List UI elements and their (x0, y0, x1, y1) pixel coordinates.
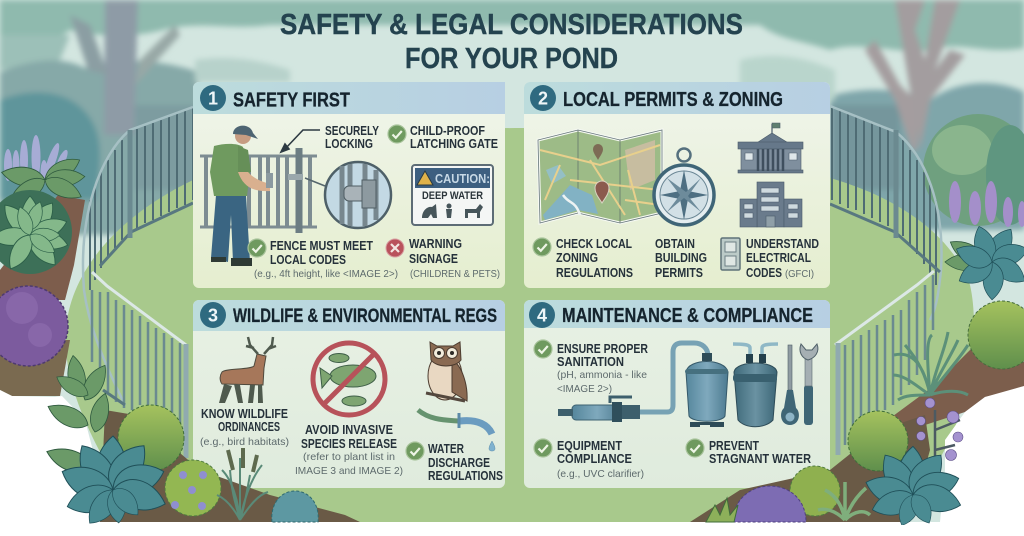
agave left (62, 436, 166, 524)
text: fence must meet local codes: (e.g., 4ft height, like <IMAGE 2>) (254, 268, 398, 280)
lawn (66, 128, 974, 522)
text: warning signage: (CHILDREN & PETS) (410, 268, 500, 280)
text: check local zoning: ZONING (556, 251, 598, 265)
purple shrub (733, 486, 806, 522)
teal shrub (272, 491, 318, 522)
text: securely locking (325, 124, 380, 151)
icon: check (388, 125, 406, 143)
text: warning signage (409, 237, 500, 280)
green bush upper right (923, 114, 1024, 226)
flower shrub (165, 460, 221, 516)
small grass (706, 498, 738, 522)
text: equipment compliance: (e.g., UVC clarifier) (557, 468, 644, 480)
title (280, 9, 743, 75)
text: ensure proper sanitation: <IMAGE 2>) (557, 383, 612, 395)
text: child-proof latching gate: CHILD-PROOF (410, 124, 485, 138)
text: equipment compliance: COMPLIANCE (557, 452, 632, 466)
header: 4 (537, 306, 547, 326)
hosta left (0, 190, 72, 274)
panel 1: safety first (193, 82, 505, 288)
text: check local zoning: CHECK LOCAL (556, 237, 632, 251)
panel body (193, 82, 505, 288)
arrow to latch (281, 130, 320, 152)
text: ensure proper sanitation: SANITATION (557, 355, 624, 369)
purple flower stems (916, 398, 964, 461)
fence: right (830, 106, 942, 455)
panel body (193, 300, 505, 488)
foreground plants: lower right (690, 332, 968, 529)
text: equipment compliance: EQUIPMENT (557, 439, 622, 453)
title: FOR YOUR POND (405, 43, 618, 75)
text: avoid invasive species: (refer to plant list in (303, 451, 395, 463)
zoning map (538, 130, 662, 223)
icon: check (686, 439, 704, 457)
wrench (800, 344, 818, 425)
text: understand electrical codes: CODES (746, 266, 782, 280)
gate fence (200, 148, 317, 233)
mulch left (0, 195, 85, 300)
text: ensure proper sanitation (557, 342, 648, 395)
header: SAFETY FIRST (233, 88, 350, 112)
lavender left (4, 135, 70, 184)
text: ensure proper sanitation: (pH, ammonia - like (557, 369, 647, 381)
text: water discharge regulations (428, 442, 503, 483)
panel 3: wildlife (193, 300, 505, 488)
text: avoid invasive species: AVOID INVASIVE (305, 423, 393, 437)
text: avoid invasive species (295, 423, 403, 477)
text: obtain building permits: PERMITS (655, 266, 703, 280)
text: know wildlife ordinances: (e.g., bird habitats) (200, 436, 289, 448)
icon: check (534, 340, 552, 358)
header (524, 82, 830, 114)
mulch strip left (100, 410, 360, 522)
title: SAFETY & LEGAL CONSIDERATIONS (280, 9, 743, 41)
text: know wildlife ordinances (200, 407, 289, 448)
text: avoid invasive species: IMAGE 3 and IMAGE 2) (295, 465, 403, 477)
text: equipment compliance (557, 439, 644, 480)
text: obtain building permits (655, 237, 707, 280)
latch magnifier (305, 162, 391, 228)
text: avoid invasive species: SPECIES RELEASE (301, 437, 397, 451)
text: understand electrical codes: UNDERSTAND (746, 237, 819, 251)
cattails (217, 448, 268, 520)
text: know wildlife ordinances: ORDINANCES (218, 420, 280, 434)
mulch strip right (690, 415, 930, 522)
icon: check (534, 439, 552, 457)
filter tank two (733, 344, 778, 427)
panel 4: maintenance (524, 300, 830, 488)
text: warning signage: WARNING (409, 237, 462, 251)
text: warning signage: SIGNAGE (409, 252, 458, 266)
text: water discharge regulations: WATER (428, 442, 464, 456)
owl (426, 342, 467, 401)
mulch under purple shrub (0, 340, 70, 396)
text: securely locking: LOCKING (325, 137, 373, 151)
text: understand electrical codes (746, 237, 819, 280)
spiky plant (893, 332, 968, 400)
office building (740, 182, 802, 227)
text: fence must meet local codes (254, 239, 398, 280)
lime shrub (118, 405, 184, 471)
climbing leaves (46, 355, 110, 470)
text: prevent stagnant water: PREVENT (709, 439, 759, 453)
text: water discharge regulations: REGULATIONS (428, 469, 503, 483)
icon: warning x (386, 239, 404, 257)
text: prevent stagnant water (709, 439, 811, 466)
right shrubs (885, 114, 1024, 425)
deer (219, 337, 276, 403)
caution sign: DEEP WATER (422, 190, 483, 202)
icon: check (248, 239, 266, 257)
government building (738, 123, 803, 173)
mulch right (885, 345, 1024, 425)
text: fence must meet local codes: LOCAL CODES (270, 253, 346, 267)
discharge pipe with drop (418, 410, 495, 451)
icon: gfci outlet (721, 238, 740, 270)
fence: left (83, 107, 193, 458)
text: child-proof latching gate (410, 124, 498, 151)
text: water discharge regulations: DISCHARGE (428, 456, 490, 470)
uv clarifier and pipe (558, 343, 708, 422)
header: 2 (538, 88, 548, 108)
panel body (524, 82, 830, 288)
text: check local zoning: REGULATIONS (556, 266, 633, 280)
header: 1 (208, 88, 218, 108)
text: understand electrical codes: ELECTRICAL (746, 251, 811, 265)
header: MAINTENANCE & COMPLIANCE (562, 304, 813, 327)
text: know wildlife ordinances: KNOW WILDLIFE (201, 407, 288, 421)
lime shrub (848, 411, 908, 471)
lavender right (949, 181, 1024, 227)
text: child-proof latching gate: LATCHING GATE (410, 137, 498, 151)
hosta right (945, 223, 1024, 300)
lime shrub small (790, 466, 840, 516)
misty tree canopies and shrubs (0, 0, 1024, 235)
caution sign: CAUTION: (435, 171, 490, 186)
foreground plants: lower left (43, 354, 360, 530)
caution sign (412, 165, 493, 225)
text: obtain building permits: OBTAIN (655, 237, 695, 251)
panel 2: local permits (524, 82, 830, 288)
green fern (818, 482, 870, 520)
header (193, 82, 505, 114)
text: ensure proper sanitation: ENSURE PROPER (557, 342, 648, 356)
header (193, 300, 505, 331)
agave right (862, 446, 964, 529)
left shrubs (0, 135, 86, 396)
white page cutouts (0, 386, 1024, 536)
header (524, 300, 830, 328)
no invasive species symbol (313, 343, 385, 415)
purple shrub (0, 286, 68, 366)
filter tank one (685, 353, 728, 427)
header: 3 (208, 306, 218, 326)
text: check local zoning (556, 237, 633, 280)
lime shrub right (968, 301, 1024, 369)
icon: check (533, 238, 551, 256)
man at gate (210, 126, 273, 266)
text: securely locking: SECURELY (325, 124, 380, 138)
text: obtain building permits: BUILDING (655, 251, 707, 265)
icon: check (406, 442, 424, 460)
header: WILDLIFE & ENVIRONMENTAL REGS (233, 305, 497, 327)
compass (654, 148, 714, 225)
green fronds (0, 153, 86, 207)
text: understand electrical codes: (GFCI) (785, 268, 814, 280)
text: fence must meet local codes: FENCE MUST MEET (270, 239, 373, 253)
header: LOCAL PERMITS & ZONING (563, 88, 783, 111)
screwdriver (781, 345, 799, 425)
text: prevent stagnant water: STAGNANT WATER (709, 452, 811, 466)
panel body (524, 300, 830, 488)
